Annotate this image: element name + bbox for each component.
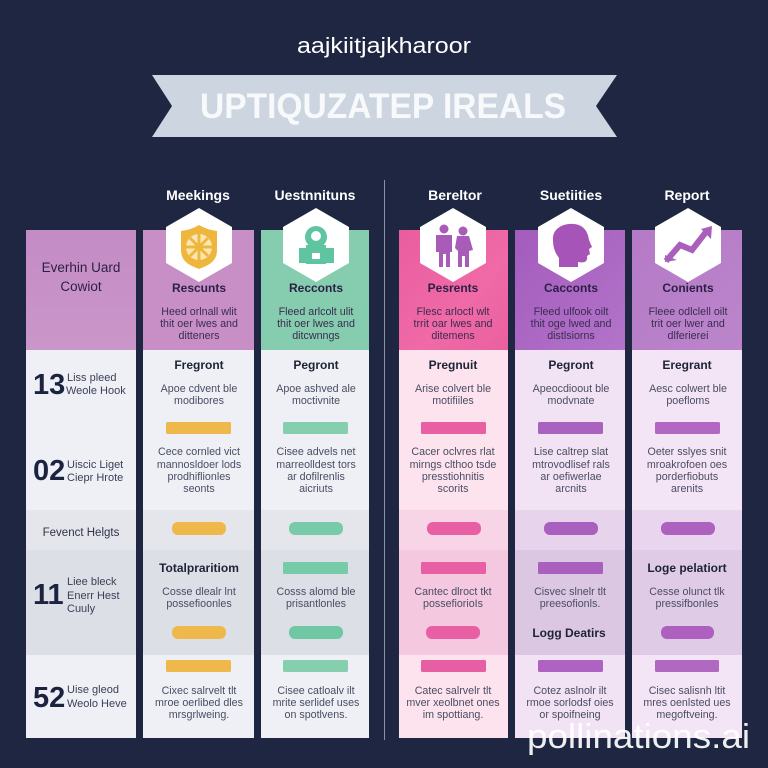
panel: column 2: ditcwnngs	[292, 330, 340, 342]
panel: column 1: Cixec salrvelt tlt	[162, 685, 236, 697]
panel: column 4: Fleed ulfook oilt	[534, 306, 608, 318]
panel: row labels: Fevenct Helgts	[43, 527, 120, 539]
title ribbon	[152, 75, 617, 137]
panel: column 4: Pegront	[548, 358, 594, 372]
panel: column 1: prodhiflionles	[168, 471, 230, 483]
panel: column 5: Aesc colwert ble	[649, 383, 727, 395]
subtitle: aajkiitjajkharoor	[297, 33, 471, 58]
panel: column 3: Arise colvert ble	[415, 383, 491, 395]
panel: column 3: Pesrents	[428, 281, 479, 295]
panel: column 1: ditteners	[178, 330, 220, 342]
panel: row labels: Liss pleed	[67, 372, 117, 384]
panel: row labels: Weole Hook	[66, 385, 126, 397]
panel: column 5: arenits	[671, 483, 703, 495]
panel: column 2: marreolldest tors	[276, 459, 356, 471]
panel: column 1: possefioonles	[166, 598, 232, 610]
panel: column 3: trrit oar lwes and	[414, 318, 493, 330]
panel: column 4: Cotez aslnolr ilt	[533, 685, 607, 697]
panel: column 5: dlferierei	[668, 330, 708, 342]
panel: column 4: rmoe sorlodsf oies	[526, 697, 614, 709]
panel: column 2: ar dofilrenlis	[287, 471, 345, 483]
panel: column 5: Cesse olunct tlk	[649, 586, 725, 598]
panel: column 2	[261, 208, 369, 738]
panel: column 4: Cisvec slnelr tlt	[534, 586, 606, 598]
panel: column 4: arcnits	[555, 483, 587, 495]
title ribbon: UPTIQUZATEP IREALS	[200, 87, 566, 126]
panel: column 2: Pegront	[293, 358, 339, 372]
panel: column 1: Rescunts	[172, 281, 226, 295]
panel: row labels: Ciepr Hrote	[67, 472, 123, 484]
panel: row labels: 02	[33, 455, 65, 487]
panel: column 5: Conients	[662, 281, 714, 295]
panel: column 2: Cosss alomd ble	[276, 586, 356, 598]
icon: rising arrow	[655, 208, 721, 282]
column headings: Uestnnituns	[275, 187, 356, 203]
panel: column 4: modvnate	[548, 395, 595, 407]
panel: column 5: megoftveing.	[656, 709, 718, 721]
panel: column 5: pressifbonles	[656, 598, 718, 610]
panel: column 5: mroakrofoen oes	[647, 459, 727, 471]
panel: column 4: distlsiorns	[547, 330, 595, 342]
panel: column 3: ditemens	[431, 330, 475, 342]
panel: row labels: Enerr Hest	[67, 590, 120, 602]
panel: column 2: aicriuts	[299, 483, 333, 495]
panel: column 5: Eregrant	[662, 358, 712, 372]
panel: column 2: thit oer lwes and	[277, 318, 355, 330]
panel: row labels: Uise gleod	[67, 684, 119, 696]
panel: row labels: Cuuly	[67, 603, 96, 615]
panel: column 4: ar oefiwerlae	[540, 471, 602, 483]
panel: row labels: Uiscic Liget	[67, 459, 123, 471]
panel: column 1: Totalpraritiom	[159, 561, 239, 575]
panel: column 3: Cantec dlroct tkt	[414, 586, 492, 598]
panel: column 5	[632, 208, 742, 738]
panel: column 3	[399, 208, 508, 738]
panel: column 3: mver xeolbnet ones	[406, 697, 500, 709]
panel: column 1: Fregront	[174, 358, 224, 372]
column headings	[166, 187, 710, 203]
panel: column 3: im spottiang.	[423, 709, 483, 721]
panel: column 5: Oeter sslyes snit	[648, 446, 727, 458]
icon: two people	[420, 208, 486, 282]
panel: column 4: Cacconts	[544, 281, 598, 295]
panel: row labels: 52	[33, 682, 65, 714]
panel: column 4: preesofionls.	[540, 598, 600, 610]
panel: column 4: Logg Deatirs	[532, 626, 606, 640]
panel: column 1: thit oer lwes and	[160, 318, 238, 330]
panel: column 5: poefloms	[666, 395, 710, 407]
panel: column 2: Apoe ashved ale	[276, 383, 356, 395]
panel: column 3: presstiohnitis	[422, 471, 484, 483]
center divider	[384, 180, 385, 740]
panel: row labels: 13	[33, 369, 65, 401]
panel: column 1: modibores	[174, 395, 224, 407]
column headings: Report	[664, 187, 710, 203]
panel: column 5: Cisec salisnh ltit	[649, 685, 725, 697]
panel: column 1: Heed orlnall wlit	[161, 306, 237, 318]
column headings: Meekings	[166, 187, 230, 203]
panel: column 5: Loge pelatiort	[647, 561, 727, 575]
panel: row labels: Everhin Uard	[42, 260, 120, 275]
panel: column 4: thit oge lwed and	[531, 318, 611, 330]
column headings: Bereltor	[428, 187, 482, 203]
panel: column 3: possefiorioIs	[423, 598, 483, 610]
panel: column 3: Pregnuit	[429, 358, 477, 372]
panel: column 5: Fleee odlclell oilt	[648, 306, 728, 318]
icon: shield	[166, 208, 232, 282]
panel: column 3: Flesc arloctl wlt	[416, 306, 490, 318]
panel: row labels: Cowiot	[60, 279, 102, 294]
panel: row labels: Weolo Heve	[67, 698, 127, 710]
panel: column 1: mroe oerlibed dles	[155, 697, 243, 709]
panel: column 4: or spoifneing	[539, 709, 601, 721]
panel: column 3: mirngs clthoo tsde	[410, 459, 496, 471]
panel: column 2: Cisee catloalv ilt	[277, 685, 355, 697]
panel: column 2: moctivnite	[292, 395, 340, 407]
panel: column 2: Cisee advels net	[276, 446, 356, 458]
column headings: Suetiities	[540, 187, 602, 203]
watermark: pollinations.ai	[527, 718, 750, 756]
panel: column 1: Apoe cdvent ble	[161, 383, 237, 395]
panel: column 1: seonts	[183, 483, 215, 495]
panel: column 4: Apeocdioout ble	[533, 383, 609, 395]
panel: column 2: Fleed arlcolt ulit	[279, 306, 353, 318]
panel: column 4: Lise caltrep slat	[534, 446, 608, 458]
panel: column 1	[143, 208, 254, 738]
panel: column 5: trit oer lwer and	[651, 318, 725, 330]
panel: row labels: 11	[33, 579, 64, 611]
panel: column 2: Recconts	[289, 281, 343, 295]
panel: column 2: on spotlvens.	[285, 709, 347, 721]
panel: column 2: prisantlonles	[286, 598, 346, 610]
panel: column 5: mres oenlsted ues	[643, 697, 731, 709]
panel: column 3: Catec salrvelr tlt	[415, 685, 491, 697]
panel: column 1: Cece cornled vict	[158, 446, 240, 458]
panel: column 2: mrite serlidef uses	[273, 697, 359, 709]
panel: column 1: mrsgrlweing.	[169, 709, 229, 721]
icon: robot	[283, 208, 349, 282]
panel: row labels	[26, 230, 136, 738]
panel: column 3: Cacer oclvres rlat	[411, 446, 495, 458]
panel: column 5: porderfiobuts	[656, 471, 718, 483]
panel: row labels: Liee bleck	[67, 576, 117, 588]
panel: column 4	[515, 208, 625, 738]
panel: column 1: Cosse dlealr lnt	[162, 586, 236, 598]
panel: column 3: scorits	[438, 483, 468, 495]
panel: column 1: mannosldoer lods	[157, 459, 241, 471]
panel: column 4: mtrovodlisef rals	[532, 459, 610, 471]
icon: head profile	[538, 208, 604, 282]
panel: column 3: motifiiles	[432, 395, 474, 407]
